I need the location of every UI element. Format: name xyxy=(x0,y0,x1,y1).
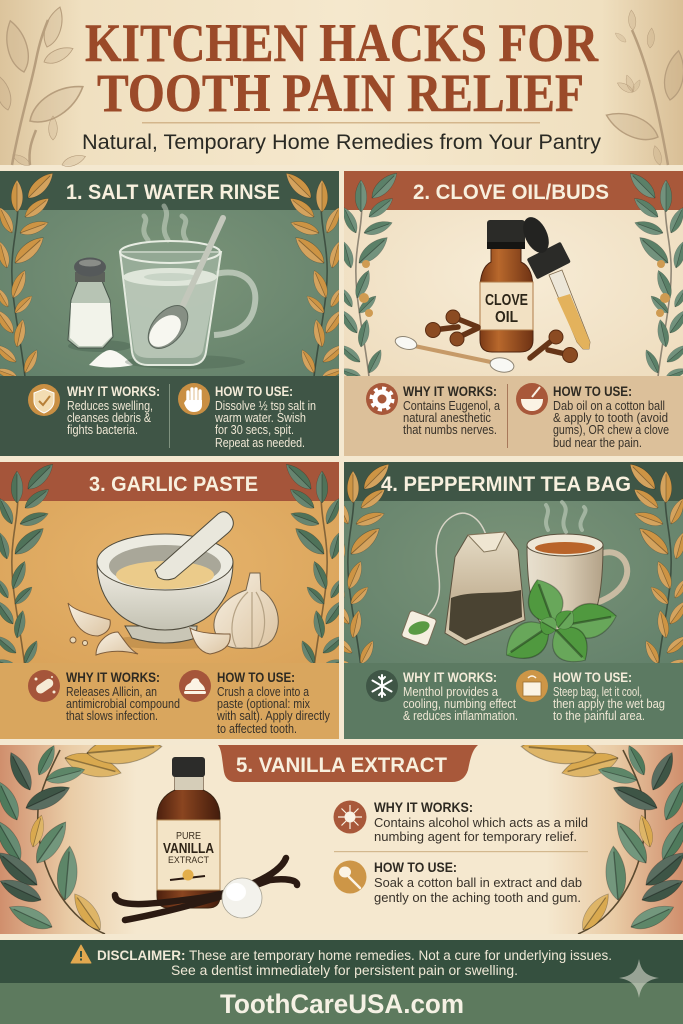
illustration: cotton ball xyxy=(222,878,262,918)
why it works: Menthol provides a xyxy=(403,684,499,699)
why it works: & reduces inflammation. xyxy=(403,708,518,723)
icon: paste dollop xyxy=(179,670,211,702)
sprigs: gold leaves xyxy=(2,464,683,934)
icon: shield xyxy=(28,384,60,416)
how to use: for 30 secs, spit. xyxy=(215,422,294,437)
panel 1: salt water rinse xyxy=(0,169,346,456)
how to use: Soak a cotton ball in extract and dab xyxy=(374,875,582,890)
illustration: cotton swab xyxy=(394,334,515,374)
icon: gear xyxy=(366,383,398,415)
how to use: with salt). Apply directly xyxy=(216,708,330,723)
illustration: garlic bulb xyxy=(214,573,278,648)
how to use: Steep bag, let it cool, xyxy=(553,684,642,699)
how to use: Dissolve ½ tsp salt in xyxy=(215,398,316,413)
how to use: & apply to tooth (avoid xyxy=(553,410,668,425)
why it works xyxy=(366,383,501,437)
how to use xyxy=(516,669,665,723)
why it works xyxy=(334,799,588,844)
heading: 4. PEPPERMINT TEA BAG xyxy=(381,473,631,496)
how to use: warm water. Swish xyxy=(214,410,306,425)
panel: title header xyxy=(0,0,683,169)
how to use: gently on the aching tooth and gum. xyxy=(374,890,581,905)
why it works: WHY IT WORKS: xyxy=(403,383,497,399)
disclaimer text: See a dentist immediately for persistent pain or swelling. xyxy=(171,962,518,978)
wreaths: left and right leaves xyxy=(0,745,683,934)
how to use xyxy=(179,669,330,736)
botanical sketch: left xyxy=(0,5,89,169)
why it works: antimicrobial compound xyxy=(66,696,180,711)
how to use xyxy=(516,383,669,450)
how to use: HOW TO USE: xyxy=(215,383,293,399)
illustration: mortar and pestle xyxy=(97,512,233,649)
sprigs: green leaves xyxy=(0,464,683,978)
why it works: fights bacteria. xyxy=(67,422,138,437)
how to use: HOW TO USE: xyxy=(217,669,295,685)
title: KITCHEN HACKS FOR xyxy=(85,13,599,73)
disclaimer text xyxy=(97,947,612,978)
illustration: tea bag xyxy=(401,513,525,646)
why it works xyxy=(28,383,160,437)
panel 4: peppermint tea bag xyxy=(329,460,683,739)
why it works: Releases Allicin, an xyxy=(66,684,157,699)
illustration: clove oil bottle: CLOVE xyxy=(485,292,528,309)
illustration: clove oil bottle xyxy=(480,220,533,352)
illustration: vanilla bottle xyxy=(157,757,220,908)
icon: virus xyxy=(334,800,366,834)
panel: disclaimer xyxy=(0,940,683,983)
icon: wet tea bag xyxy=(516,670,548,702)
how to use: paste (optional: mix xyxy=(217,696,310,711)
why it works: that numbs nerves. xyxy=(403,422,497,437)
heading tab: 5. VANILLA EXTRACT xyxy=(236,754,447,777)
illustration: tea cup with steam xyxy=(527,502,627,630)
how to use: HOW TO USE: xyxy=(374,859,457,875)
illustration: salt shaker xyxy=(68,258,132,352)
illustration: vanilla beans xyxy=(115,858,297,920)
how to use: HOW TO USE: xyxy=(553,383,632,399)
icon: warning triangle xyxy=(71,945,91,963)
why it works: WHY IT WORKS: xyxy=(66,669,160,685)
icon: cotton swab spoon xyxy=(334,860,366,894)
why it works: WHY IT WORKS: xyxy=(374,799,473,815)
why it works: natural anesthetic xyxy=(403,410,491,425)
subtitle: Natural, Temporary Home Remedies from Your Pantry xyxy=(82,131,602,154)
title: TOOTH PAIN RELIEF xyxy=(97,63,584,123)
title xyxy=(85,13,599,123)
panel 3: garlic paste xyxy=(0,460,346,739)
heading: 3. GARLIC PASTE xyxy=(89,473,258,496)
panel 2: clove oil xyxy=(337,169,683,456)
illustration: clove buds xyxy=(426,310,578,362)
why it works: cooling, numbing effect xyxy=(403,696,516,711)
footer xyxy=(0,983,683,1024)
panel 5: vanilla extract xyxy=(0,733,683,935)
why it works xyxy=(28,669,180,723)
botanical sketch: right xyxy=(603,10,683,166)
why it works: Reduces swelling, xyxy=(67,398,153,413)
sprigs: gold leaves xyxy=(0,173,682,934)
icon: hand xyxy=(178,383,210,415)
icon: snowflake xyxy=(366,670,398,702)
heading: 1. SALT WATER RINSE xyxy=(66,181,280,204)
why it works xyxy=(366,669,518,723)
steam xyxy=(144,206,186,240)
icon: bacteria xyxy=(28,670,60,702)
disclaimer text: DISCLAIMER: These are temporary home remedies. Not a cure for underlying issues. xyxy=(97,947,612,963)
why it works: WHY IT WORKS: xyxy=(403,669,497,685)
heading: 2. CLOVE OIL/BUDS xyxy=(413,181,609,204)
why it works: Contains Eugenol, a xyxy=(403,398,501,413)
website: ToothCareUSA.com xyxy=(220,989,464,1019)
icon: sparkle xyxy=(619,959,659,998)
illustration: garlic cloves xyxy=(68,603,230,655)
illustration: glass of water with spoon xyxy=(120,206,255,369)
illustration: vanilla bottle: PURE xyxy=(176,831,201,842)
heading tab xyxy=(218,745,478,782)
why it works: WHY IT WORKS: xyxy=(67,383,160,399)
how to use: to affected tooth. xyxy=(217,721,297,736)
how to use: HOW TO USE: xyxy=(553,669,632,685)
how to use: bud near the pain. xyxy=(553,435,642,450)
illustration: vanilla bottle: EXTRACT xyxy=(168,855,209,866)
how to use: Crush a clove into a xyxy=(217,684,310,699)
icon: bowl xyxy=(516,383,548,415)
illustration: vanilla bottle: VANILLA xyxy=(163,840,214,857)
why it works: that slows infection. xyxy=(66,708,158,723)
how to use xyxy=(178,383,316,450)
illustration: salt pile xyxy=(89,350,133,368)
illustration: dropper xyxy=(518,213,590,349)
how to use xyxy=(334,859,582,905)
illustration: mint sprig xyxy=(497,574,619,672)
why it works: Contains alcohol which acts as a mild xyxy=(374,815,588,830)
why it works: numbing agent for temporary relief. xyxy=(374,829,577,844)
how to use: Repeat as needed. xyxy=(215,435,305,450)
how to use: then apply the wet bag xyxy=(553,696,665,711)
why it works: cleanses debris & xyxy=(67,410,151,425)
how to use: to the painful area. xyxy=(553,708,645,723)
illustration: clove oil bottle: OIL xyxy=(495,309,518,326)
sprigs: green leaves xyxy=(2,173,683,912)
